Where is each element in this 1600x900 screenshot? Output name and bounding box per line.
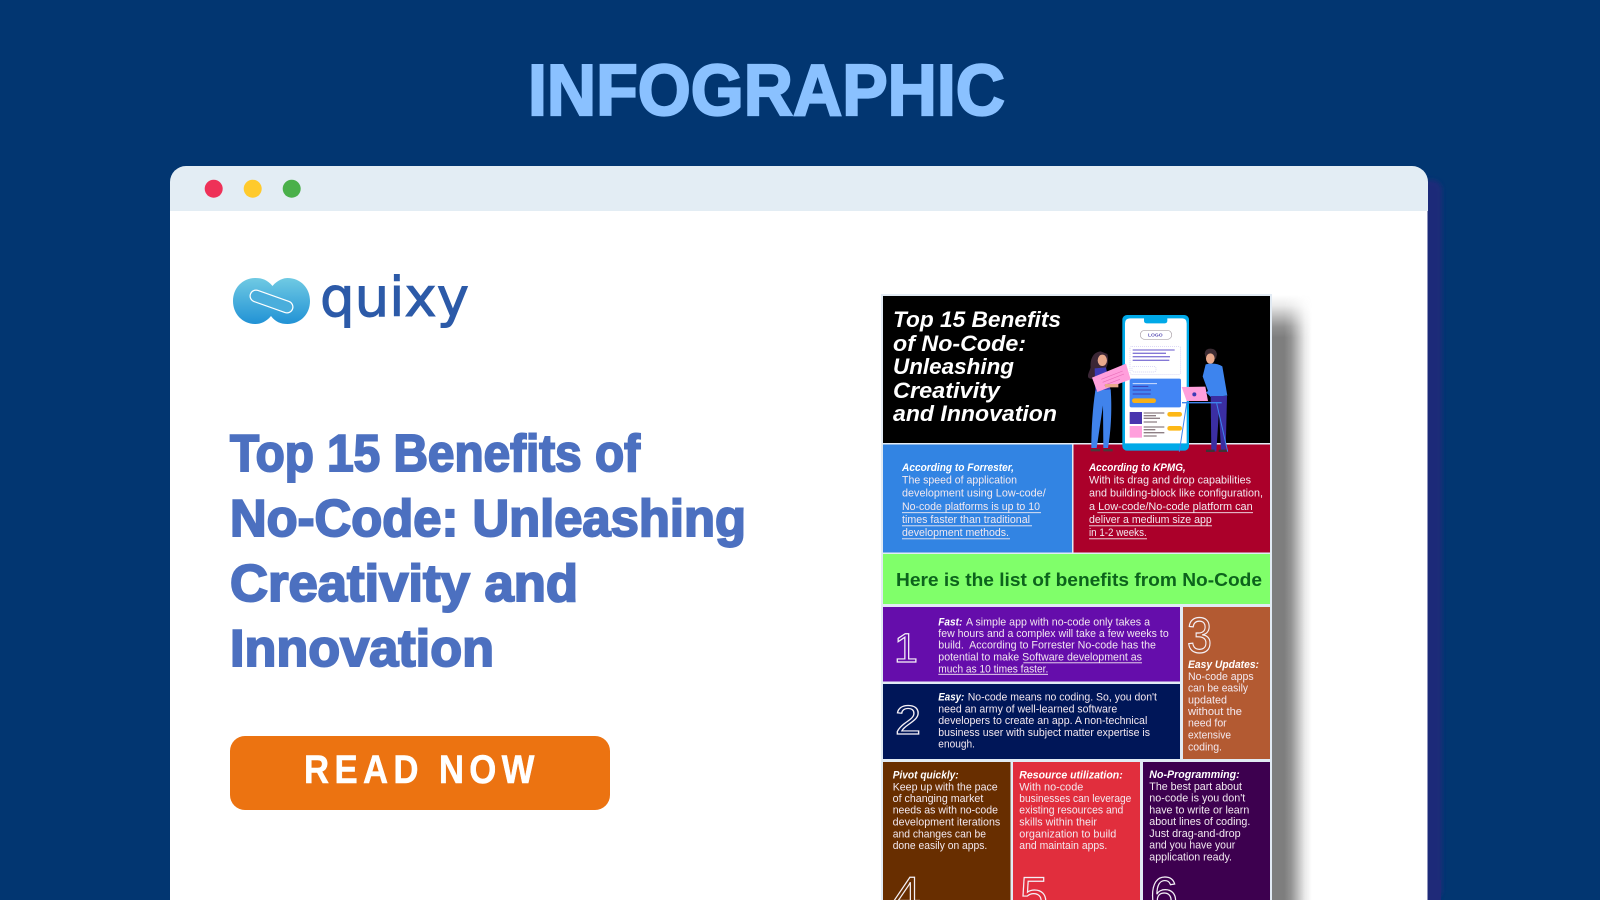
panel: 6 No-Programming: Just drag-and-drop: [1149, 828, 1241, 840]
panel: 3 Easy Updates: without the: [1187, 706, 1242, 718]
panel: 6 No-Programming: application ready.: [1149, 852, 1232, 864]
panel: KPMG stat: According to KPMG,: [1088, 462, 1186, 474]
man: [1179, 349, 1228, 452]
panel: 6 No-Programming: The best part about: [1149, 781, 1242, 793]
woman: [1088, 351, 1131, 451]
panel: 6 No-Programming: and you have your: [1149, 840, 1236, 852]
panel: 3 Easy Updates: can be easily: [1188, 683, 1249, 695]
preview sheet: [881, 294, 1272, 900]
panel: 6 No-Programming: no-code is you don't: [1149, 793, 1245, 805]
panel: 1 Fast: few hours and a complex will take a few weeks to: [938, 628, 1169, 640]
panel: 1 Fast: potential to make Software development as: [938, 652, 1142, 664]
panel: Forrester stat: [883, 444, 1072, 552]
panel: 2 Easy: [883, 684, 1180, 759]
panel: 1 Fast: [883, 607, 1180, 682]
panel: list heading: [883, 554, 1270, 604]
browser window: [170, 166, 1442, 900]
window shadow: [1200, 180, 1442, 900]
panel: 3 Easy Updates: updated: [1188, 694, 1227, 706]
logo: quixy: [233, 266, 469, 329]
panel: 6 No-Programming: about lines of coding.: [1149, 816, 1250, 828]
panel: 5 Resource utilization: organization to build: [1019, 828, 1116, 840]
header title: Top 15 Benefits: [893, 307, 1061, 332]
panel: 6 No-Programming: [1143, 762, 1270, 900]
title: INFOGRAPHIC: [528, 51, 1005, 131]
panel: Forrester stat: According to Forrester,: [901, 462, 1014, 474]
phone: LOGO: [1148, 333, 1163, 339]
panel: 2 Easy: business user with subject matter expertise is: [938, 727, 1150, 739]
panel: Forrester stat: times faster than traditional: [902, 514, 1030, 526]
panel: list heading: Here is the list of benefits from No-Code: [896, 569, 1262, 590]
panel: 5 Resource utilization: [1013, 762, 1140, 900]
read now button: READ NOW: [304, 747, 535, 792]
panel: 2 Easy: No-code means no coding. So, you don't: [968, 692, 1157, 704]
panel: 5 Resource utilization: With no-code: [1019, 781, 1083, 793]
logo wordmark: quixy: [320, 266, 469, 329]
panel: 3 Easy Updates: coding.: [1188, 741, 1222, 753]
header title: Creativity: [893, 378, 1002, 403]
header title: [893, 307, 1061, 426]
number 3: 3: [1187, 608, 1212, 664]
panel: Forrester stat: The speed of application: [902, 474, 1017, 486]
heading: No-Code: Unleashing: [230, 490, 746, 548]
panel: 5 Resource utilization: and maintain apps.: [1019, 840, 1107, 852]
infographic preview: [881, 294, 1312, 900]
panel: KPMG stat: a Low-code/No-code platform can: [1089, 501, 1253, 513]
panel: 4 Pivot quickly: needs as with no-code: [893, 805, 998, 817]
panel: 5 Resource utilization: existing resources and: [1019, 805, 1123, 817]
preview drop shadow: [1272, 295, 1312, 900]
panel: 5 Resource utilization: skills within their: [1019, 816, 1097, 828]
illustration: phone and two people: [1088, 315, 1228, 452]
panel: 6 No-Programming: have to write or learn: [1149, 804, 1249, 816]
panel: Forrester stat: development using Low-code/: [902, 488, 1046, 500]
header title: and Innovation: [893, 401, 1057, 426]
panel: header: [883, 296, 1270, 443]
panel: 1 Fast: much as 10 times faster.: [938, 663, 1048, 675]
heading: Innovation: [230, 620, 494, 678]
panel: 5 Resource utilization: Resource utilization:: [1019, 769, 1123, 781]
number 1: 1: [894, 625, 918, 671]
panel: KPMG stat: [1074, 444, 1270, 552]
panel: 4 Pivot quickly: done easily on apps.: [893, 840, 987, 852]
panel: 4 Pivot quickly: Pivot quickly:: [893, 769, 959, 781]
panel: KPMG stat: and building-block like configuration,: [1089, 488, 1263, 500]
heading: Creativity and: [230, 555, 578, 613]
panel: 1 Fast: Fast:: [938, 616, 962, 628]
panel: 6 No-Programming: No-Programming:: [1149, 769, 1240, 781]
panel: 2 Easy: enough.: [938, 739, 975, 751]
panel: 4 Pivot quickly: development iterations: [893, 816, 1000, 828]
panel: 3 Easy Updates: No-code apps: [1188, 671, 1254, 683]
panel: 2 Easy: developers to create an app. A non-technical: [938, 715, 1147, 727]
panel: 4 Pivot quickly: of changing market: [893, 793, 983, 805]
panel: 1 Fast: A simple app with no-code only takes a: [966, 616, 1150, 628]
panel: Forrester stat: No-code platforms is up to 10: [902, 501, 1040, 513]
panel: 4 Pivot quickly: Keep up with the pace: [893, 781, 998, 793]
panel: Forrester stat: development methods.: [902, 527, 1009, 539]
heading: [230, 425, 746, 678]
read now button: [230, 736, 610, 810]
panel: 3 Easy Updates: need for: [1188, 718, 1227, 730]
panel: 3 Easy Updates: extensive: [1188, 730, 1231, 742]
panel: KPMG stat: With its drag and drop capabilities: [1089, 474, 1251, 486]
panel: 3 Easy Updates: [1183, 607, 1270, 759]
header title: of No-Code:: [893, 331, 1026, 356]
panel: 5 Resource utilization: businesses can leverage: [1019, 793, 1131, 805]
window body: [170, 190, 1428, 900]
panel: 4 Pivot quickly: and changes can be: [893, 828, 986, 840]
panel: KPMG stat: deliver a medium size app: [1089, 514, 1212, 526]
icon: infinity mark: [233, 278, 310, 324]
header title: Unleashing: [893, 354, 1015, 379]
heading: Top 15 Benefits of: [230, 425, 641, 483]
window control dots: [205, 180, 301, 198]
panel: 2 Easy: need an army of well-learned software: [938, 703, 1117, 715]
panel: 2 Easy: Easy:: [938, 692, 964, 704]
panel: 3 Easy Updates: Easy Updates:: [1188, 659, 1259, 671]
panel: 4 Pivot quickly: [883, 762, 1010, 900]
panel: KPMG stat: in 1-2 weeks.: [1089, 527, 1147, 539]
panel: 1 Fast: build. According to Forrester No-code has the: [938, 640, 1156, 652]
window title bar: [170, 166, 1428, 211]
number 2: 2: [895, 697, 921, 743]
